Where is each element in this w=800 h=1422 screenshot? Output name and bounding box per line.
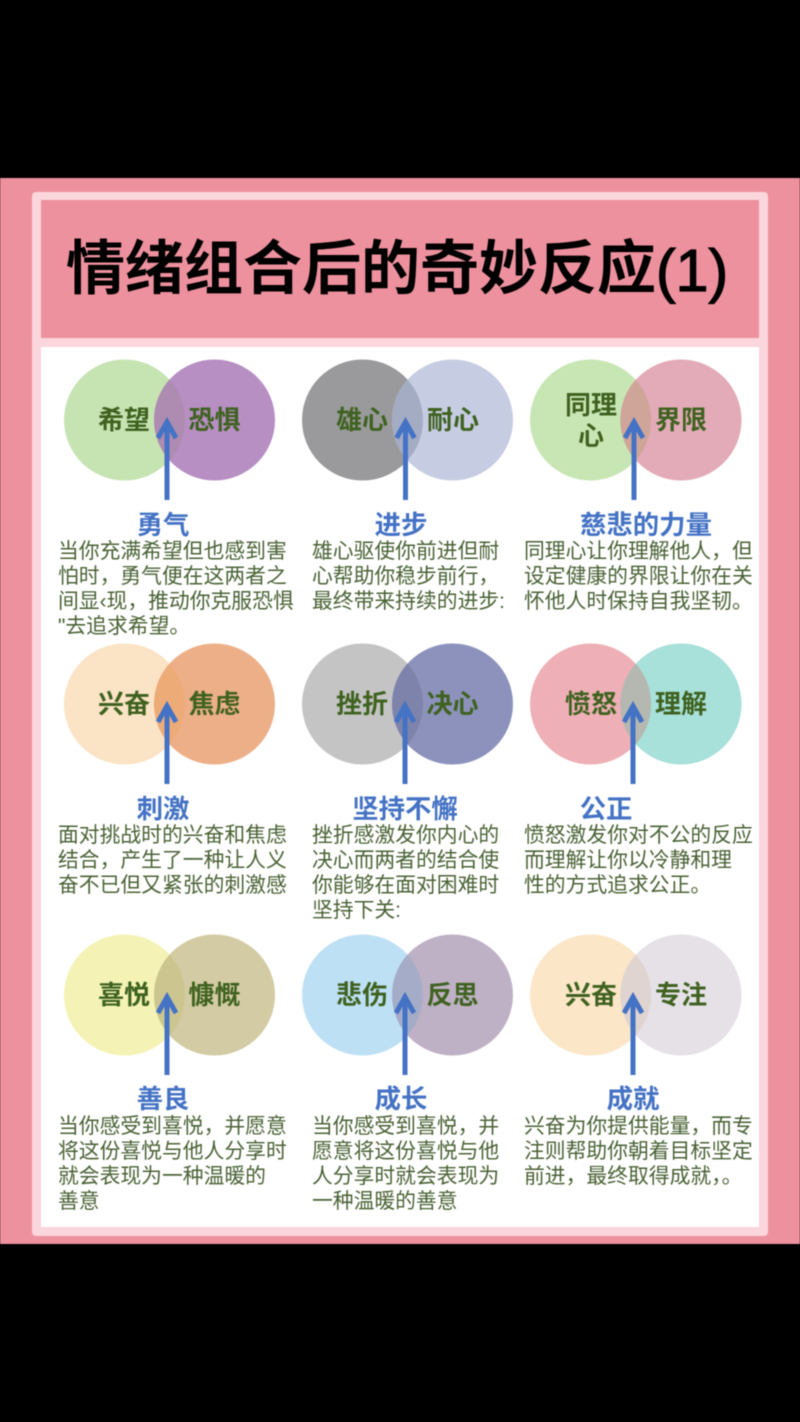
text: 成就 description: 前进，最终取得成就，。 — [524, 1165, 742, 1188]
venn diagram: 同理心 and 界限 — [530, 359, 742, 501]
text: 坚持不懈 description: 你能够在面对困难时 — [312, 874, 499, 897]
text: 坚持不懈 description — [312, 823, 500, 922]
panel: 成就 — [524, 934, 753, 1188]
text: 成就 description — [524, 1114, 753, 1188]
text: 勇气 description — [58, 539, 294, 638]
light pink frame — [32, 192, 768, 1236]
venn diagram: 愤怒 and 理解: 理解 — [655, 689, 707, 719]
white content panel — [41, 347, 759, 1227]
panel: 刺激 — [58, 642, 287, 897]
text: 刺激 description: 面对挑战时的兴奋和焦虑 — [58, 824, 287, 846]
venn diagram: 愤怒 and 理解: 愤怒 — [565, 689, 617, 719]
text: 刺激 description: 结合，产生了一种让人义 — [58, 849, 287, 872]
text: 慈悲的力量 description: 设定健康的界限让你在关 — [524, 565, 753, 588]
heading: 进步: 进步 — [375, 510, 427, 540]
pink background band — [0, 178, 800, 1244]
text: 成长 description: 当你感受到喜悦，并 — [312, 1114, 499, 1138]
text: 公正 description: 性的方式追求公正。 — [524, 874, 711, 897]
text: 成长 description: 人分享时就会表现为 — [312, 1165, 499, 1188]
venn diagram: 雄心 and 耐心: 雄心 — [336, 405, 388, 435]
panel: 勇气 — [58, 358, 294, 638]
venn diagram: 同理心 and 界限: 界限 — [655, 405, 707, 435]
panel: 成长 — [302, 934, 514, 1213]
text: 公正 description: 愤怒激发你对不公的反应 — [524, 824, 753, 846]
text: 勇气 description: 当你充满希望但也感到害 — [58, 540, 287, 562]
heading: 坚持不懈: 坚持不懈 — [352, 794, 458, 824]
heading: 成长: 成长 — [375, 1084, 427, 1114]
venn diagram: 兴奋 and 专注: 兴奋 — [565, 980, 617, 1010]
title: 情绪组合后的奇妙反应(1) — [66, 236, 728, 304]
venn diagram: 悲伤 and 反思: 悲伤 — [336, 980, 388, 1010]
venn diagram: 兴奋 and 焦虑: 兴奋 — [98, 689, 150, 719]
text: 坚持不懈 description: 挫折感激发你内心的 — [312, 824, 499, 846]
venn diagram: 喜悦 and 慷慨 — [64, 934, 276, 1076]
text: 慈悲的力量 description: 同理心让你理解他人，但 — [524, 540, 753, 562]
venn diagram: 希望 and 恐惧 — [64, 358, 276, 501]
text: 勇气 description: 怕时，勇气便在这两者之 — [58, 565, 287, 588]
text: 善良 description: 善意 — [58, 1190, 100, 1213]
text: 慈悲的力量 description: 怀他人时保持自我坚韧。 — [524, 590, 753, 613]
text: 进步 description: 最终带来持续的进步: — [312, 590, 505, 613]
panel: 善良 — [58, 934, 287, 1213]
text: 善良 description — [58, 1114, 287, 1213]
text: 善良 description: 就会表现为一种温暖的 — [58, 1165, 266, 1188]
text: 勇气 description: 间显‹现，推动你克服恐惧 — [58, 590, 294, 613]
heading: 成就: 成就 — [607, 1084, 659, 1114]
panel: 慈悲的力量 — [524, 359, 753, 613]
text: 坚持不懈 description: 坚持下关: — [312, 899, 401, 922]
text: 成长 description — [312, 1114, 500, 1213]
venn diagram: 希望 and 恐惧: 恐惧 — [188, 405, 241, 435]
text: 坚持不懈 description: 决心而两者的结合使 — [312, 849, 499, 872]
panel: 进步 — [302, 359, 514, 613]
text: 善良 description: 当你感受到喜悦，并愿意 — [58, 1114, 287, 1138]
text: 进步 description: 心帮助你稳步前行， — [312, 565, 499, 588]
venn diagram: 兴奋 and 焦虑 — [64, 642, 276, 785]
text: 刺激 description — [58, 823, 287, 897]
panel: 坚持不懈 — [302, 642, 514, 922]
venn diagram: 雄心 and 耐心: 耐心 — [427, 405, 479, 435]
heading: 刺激: 刺激 — [137, 794, 189, 824]
text: 公正 description — [524, 823, 753, 897]
text: 进步 description — [312, 540, 505, 613]
heading: 善良: 善良 — [137, 1084, 189, 1114]
text: 善良 description: 将这份喜悦与他人分享时 — [58, 1140, 287, 1163]
text: 刺激 description: 奋不已但又紧张的刺激感 — [58, 874, 287, 897]
venn diagram: 兴奋 and 焦虑: 焦虑 — [188, 689, 241, 719]
heading: 公正: 公正 — [580, 794, 632, 824]
venn diagram: 同理心 and 界限: 心 — [578, 421, 604, 451]
title banner — [41, 200, 759, 338]
panel: 公正 — [524, 643, 753, 897]
text: 成就 description: 兴奋为你提供能量，而专 — [524, 1114, 753, 1138]
venn diagram: 悲伤 and 反思: 反思 — [426, 980, 479, 1010]
venn diagram: 喜悦 and 慷慨: 慷慨 — [188, 980, 241, 1010]
venn diagram: 希望 and 恐惧: 希望 — [98, 405, 150, 435]
text: 公正 description: 而理解让你以冷静和理 — [524, 849, 732, 872]
venn diagram: 同理心 and 界限: 同理 — [565, 390, 617, 420]
heading: 勇气: 勇气 — [137, 510, 189, 540]
venn diagram: 雄心 and 耐心 — [302, 359, 514, 501]
venn diagram: 挫折 and 决心: 挫折 — [336, 689, 388, 719]
venn diagram: 愤怒 and 理解 — [530, 643, 742, 785]
venn diagram: 挫折 and 决心 — [302, 642, 514, 785]
venn diagram: 兴奋 and 专注 — [530, 934, 742, 1076]
heading: 慈悲的力量: 慈悲的力量 — [580, 510, 712, 540]
venn diagram: 挫折 and 决心: 决心 — [426, 689, 479, 719]
text: 成就 description: 注则帮助你朝着目标坚定 — [524, 1140, 753, 1163]
text: 慈悲的力量 description — [524, 539, 753, 613]
text: 成长 description: 一种温暖的善意 — [312, 1190, 458, 1213]
venn diagram: 喜悦 and 慷慨: 喜悦 — [98, 980, 150, 1010]
venn diagram: 悲伤 and 反思 — [302, 934, 514, 1076]
text: 成长 description: 愿意将这份喜悦与他 — [312, 1140, 499, 1163]
text: 勇气 description: "去追求希望。 — [58, 615, 190, 638]
text: 进步 description: 雄心驱使你前进但耐 — [312, 540, 499, 562]
venn diagram: 兴奋 and 专注: 专注 — [655, 980, 707, 1010]
